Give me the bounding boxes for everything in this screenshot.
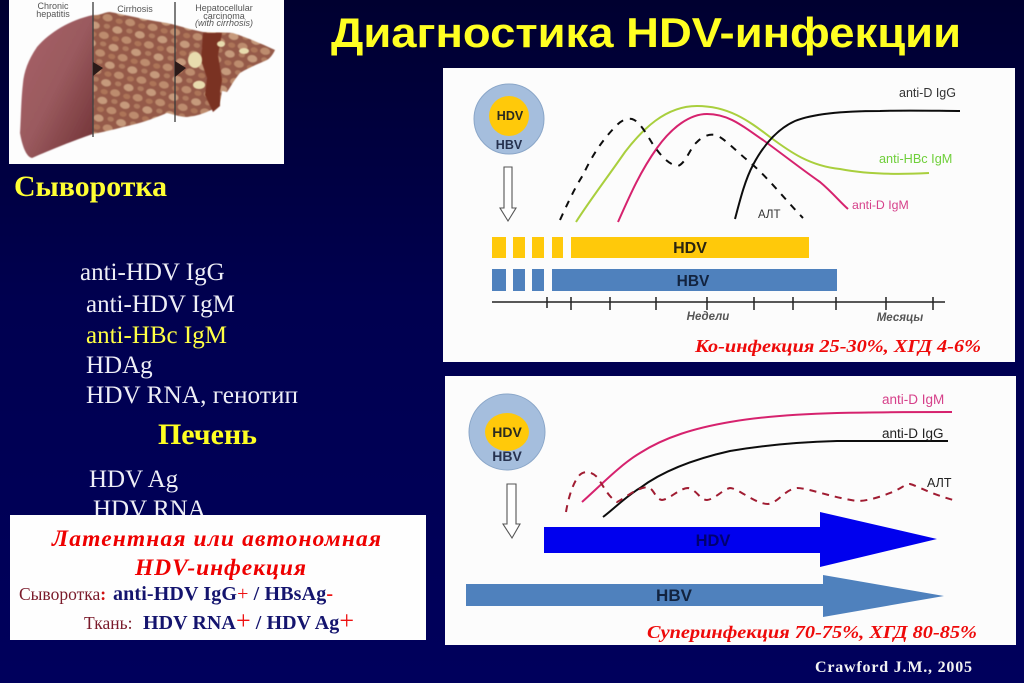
serum heading: Сыворотка [14, 170, 167, 203]
stage labels: Hepatocellular [195, 3, 253, 13]
curve labels: anti-D IgM [852, 198, 909, 212]
stage labels: Chronic [37, 1, 69, 11]
liver illustration panel [9, 0, 284, 164]
bar: HDV: HDV [673, 240, 707, 257]
stage labels: (with cirrhosis) [195, 18, 253, 28]
title: Диагностика HDV-инфекции [331, 9, 961, 56]
callout heading: Латентная или автономная [51, 526, 381, 552]
serum markers list: anti-HBc IgM [86, 322, 227, 349]
liver markers list: HDV Ag [89, 466, 179, 493]
callout: latent infection [10, 515, 426, 640]
citation: Crawford J.M., 2005 [815, 659, 972, 676]
stage labels [36, 1, 253, 28]
time axis [492, 297, 945, 310]
liver: tumour mass [201, 33, 222, 112]
bar: HBV [492, 269, 837, 291]
liver: chronic hepatitis lobe [20, 15, 93, 158]
stage markers [93, 61, 186, 77]
arrow: HBV [466, 575, 944, 617]
arrow: HDV: HDV [696, 532, 730, 550]
icon: HDV on HBV virion [469, 394, 545, 470]
icon: HDV in HBV virion [474, 84, 544, 154]
callout tissue markers: HDV RNA+ / HDV Ag+ [143, 606, 354, 635]
icon: HDV in HBV virion: HBV [496, 138, 523, 152]
arrow: HBV: HBV [656, 586, 693, 605]
liver: pale nodules [188, 41, 249, 89]
stage labels: carcinoma [203, 11, 245, 21]
liver markers list [89, 466, 206, 523]
curve: anti-D IgG [603, 441, 948, 517]
caption: superinfection: Суперинфекция 70-75%, ХГД 80-85% [647, 622, 977, 642]
stage labels: Cirrhosis [117, 4, 153, 14]
liver: cirrhosis section [93, 12, 275, 134]
arrow: HDV [544, 512, 937, 567]
curves [566, 412, 957, 517]
callout serum markers: anti-HDV IgG+ / HBsAg- [113, 583, 333, 605]
serum markers list [80, 259, 298, 409]
bar: HDV [492, 237, 809, 258]
curve labels [882, 392, 952, 490]
callout heading: HDV-инфекция [134, 555, 306, 581]
curve: ALT [560, 119, 803, 220]
curve labels: anti-HBc IgM [879, 152, 952, 166]
serum markers list: HDAg [86, 352, 153, 379]
serum markers list: anti-HDV IgM [86, 291, 235, 318]
arrow: infection down [500, 167, 516, 221]
axis labels [687, 311, 923, 324]
icon: HDV on HBV virion: HBV [492, 448, 522, 464]
curve labels [758, 86, 956, 221]
curve labels: anti-D IgG [882, 426, 944, 441]
icon: HDV in HBV virion: HDV [497, 109, 524, 123]
serum markers list: HDV RNA, генотип [86, 382, 298, 409]
curve labels: anti-D IgM [882, 392, 944, 407]
curve: ALT [566, 472, 957, 512]
liver heading: Печень [158, 418, 257, 451]
axis labels: Месяцы [877, 312, 923, 324]
callout heading [51, 526, 381, 581]
panel: superinfection chart [445, 376, 1016, 645]
curves [560, 106, 960, 222]
curve: anti-D IgM [582, 412, 952, 502]
curve: anti-D IgG [735, 111, 960, 219]
callout serum line: Сыворотка: [19, 584, 106, 604]
curve labels: АЛТ [758, 209, 780, 221]
curve labels: АЛТ [927, 476, 952, 490]
arrow: superinfection down [503, 484, 520, 538]
curve: anti-HBc IgM [576, 106, 929, 222]
callout tissue line: Ткань: [84, 613, 132, 633]
stage divider lines [93, 2, 175, 137]
icon: HDV on HBV virion: HDV [492, 424, 522, 440]
curve: anti-D IgM [618, 114, 848, 222]
caption: co-infection: Ко-инфекция 25-30%, ХГД 4-6% [694, 336, 981, 356]
bar: HBV: HBV [677, 273, 710, 290]
axis labels: Недели [687, 311, 729, 323]
liver markers list: HDV RNA [93, 496, 206, 523]
panel: co-infection chart [443, 68, 1015, 362]
curve labels: anti-D IgG [899, 86, 956, 100]
serum markers list: anti-HDV IgG [80, 259, 225, 286]
stage labels: hepatitis [36, 9, 70, 19]
